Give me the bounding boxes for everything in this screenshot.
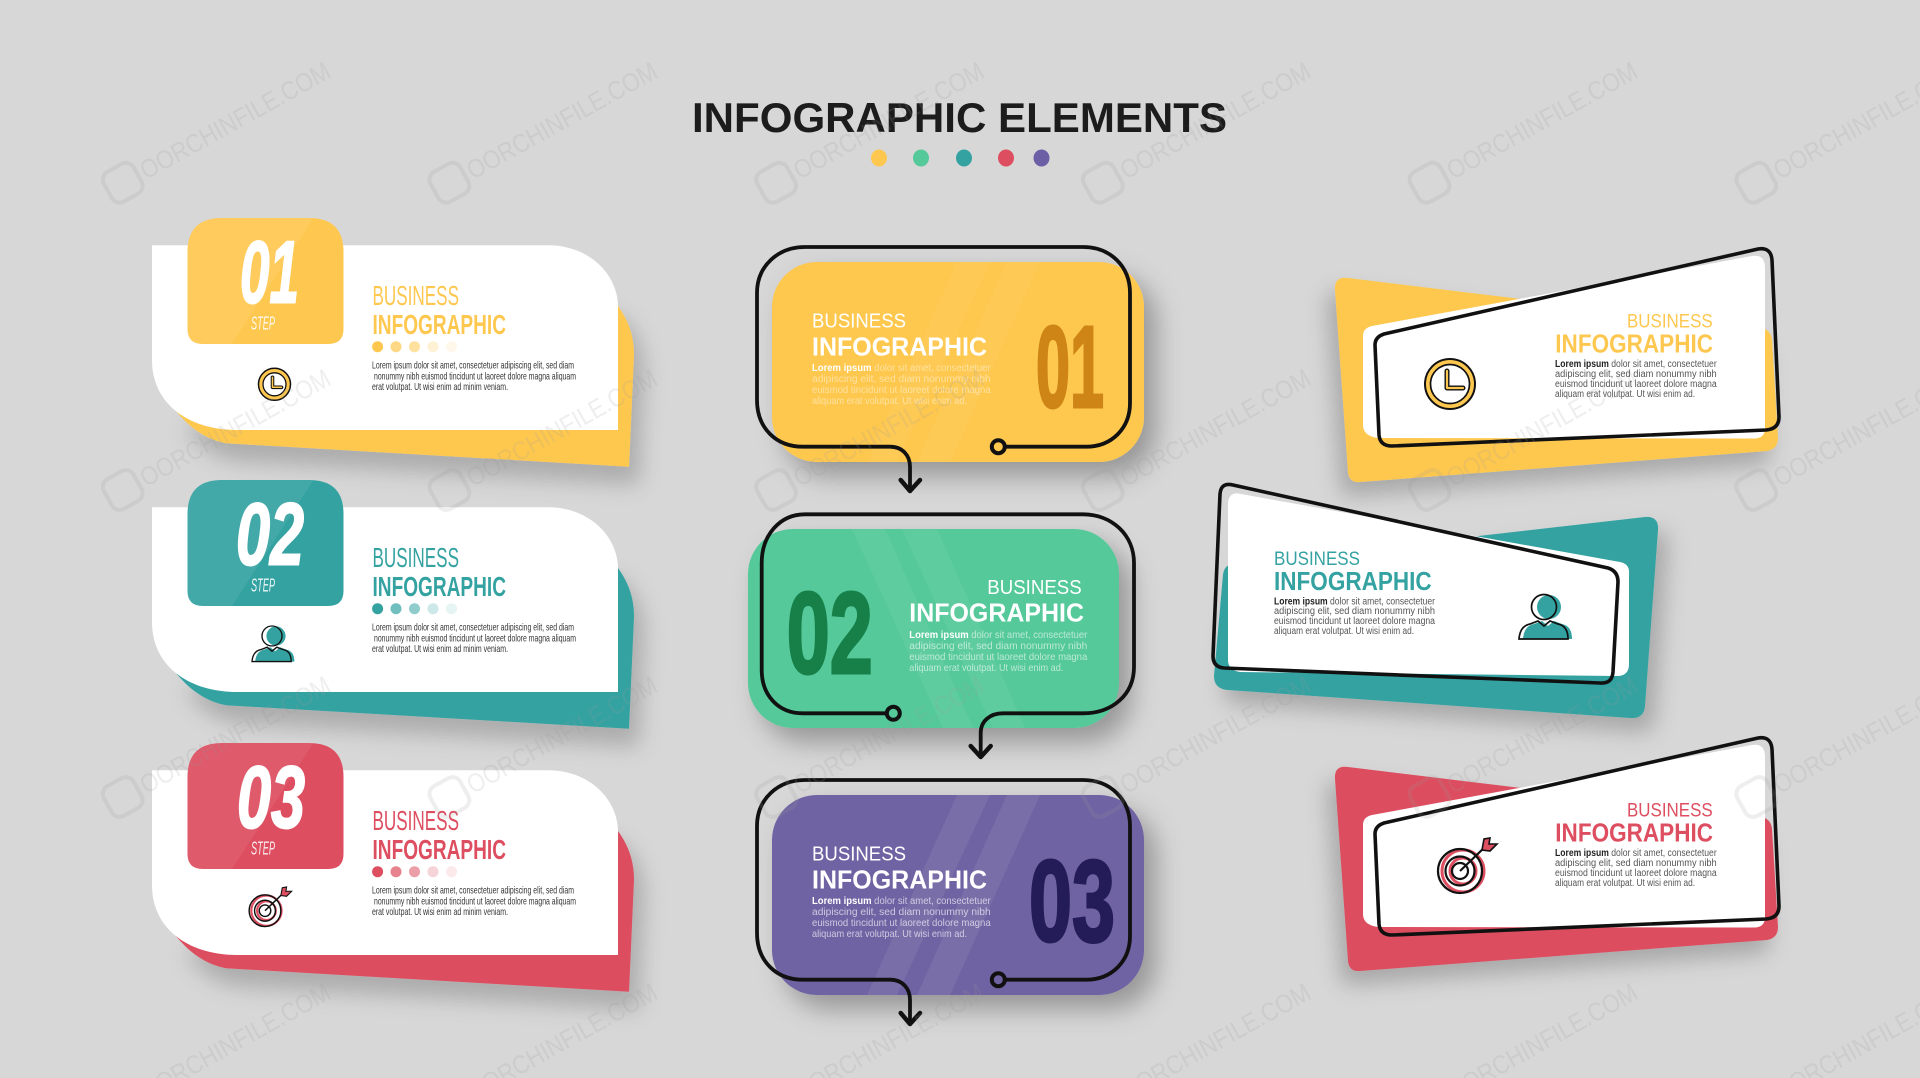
body text: euismod tincidunt ut laoreet dolore magna <box>1555 379 1717 390</box>
step label: STEP <box>251 838 275 858</box>
heading: BUSINESS <box>1627 311 1713 333</box>
watermarks: OORCHINFILE.COM <box>788 56 989 185</box>
body text: adipiscing elit, sed diam nonummy nibh <box>1555 858 1717 869</box>
heading: BUSINESS <box>372 542 459 573</box>
panel: left step 02 <box>152 476 634 729</box>
body text <box>812 896 991 940</box>
subheading: INFOGRAPHIC <box>812 331 987 361</box>
body text: euismod tincidunt ut laoreet dolore magna <box>1555 868 1717 879</box>
outline with arrow <box>757 780 1130 1024</box>
body text: adipiscing elit, sed diam nonummy nibh <box>812 907 991 918</box>
panel: right 03 <box>1335 738 1779 971</box>
subheading: INFOGRAPHIC <box>1274 568 1432 596</box>
panel: left step 01 <box>152 214 634 467</box>
icon: person <box>1519 594 1572 639</box>
icon: person <box>252 626 294 662</box>
body text <box>1555 848 1717 889</box>
watermarks: OORCHINFILE.COM <box>461 56 662 185</box>
subheading: INFOGRAPHIC <box>1555 819 1713 847</box>
subheading: INFOGRAPHIC <box>909 598 1084 628</box>
step label: STEP <box>251 575 275 595</box>
step number: 01 <box>240 222 299 321</box>
heading: BUSINESS <box>1627 800 1713 822</box>
body text: Lorem ipsum dolor sit amet, consectetuer <box>909 630 1088 641</box>
body text: adipiscing elit, sed diam nonummy nibh <box>1274 606 1435 617</box>
step number: 02 <box>236 484 304 583</box>
panel: centre 03 <box>757 780 1144 1024</box>
body text: nonummy nibh euismod tincidunt ut laoreet dolore magna aliquam <box>374 895 576 907</box>
subheading: INFOGRAPHIC <box>372 309 506 340</box>
body text: euismod tincidunt ut laoreet dolore magna <box>812 918 991 929</box>
watermarks: OORCHINFILE.COM <box>461 670 662 799</box>
watermarks: OORCHINFILE.COM <box>788 363 989 492</box>
panel: right 02 <box>1213 484 1658 718</box>
subheading: INFOGRAPHIC <box>372 571 506 602</box>
watermarks: OORCHINFILE.COM <box>135 363 336 492</box>
heading: BUSINESS <box>812 310 906 332</box>
body text: euismod tincidunt ut laoreet dolore magna <box>909 652 1088 663</box>
icon: target <box>249 887 292 927</box>
box highlight <box>188 480 313 606</box>
watermarks: OORCHINFILE.COM <box>135 56 336 185</box>
body text: aliquam erat volutpat. Ut wisi enim ad. <box>1555 878 1695 889</box>
white card <box>1363 745 1765 928</box>
black outline <box>1375 738 1779 935</box>
subheading: INFOGRAPHIC <box>812 864 987 894</box>
watermarks: OORCHINFILE.COM <box>1115 56 1316 185</box>
body text: nonummy nibh euismod tincidunt ut laoreet dolore magna aliquam <box>374 632 576 644</box>
body text: Lorem ipsum dolor sit amet, consectetuer adipiscing elit, sed diam <box>372 359 574 371</box>
icon: clock <box>1425 359 1475 409</box>
streaks <box>852 529 1025 728</box>
body text <box>909 630 1088 674</box>
box highlight <box>188 743 313 869</box>
body text: aliquam erat volutpat. Ut wisi enim ad. <box>1555 389 1695 400</box>
icon: clock <box>258 368 290 400</box>
body text <box>1274 596 1436 637</box>
body text: aliquam erat volutpat. Ut wisi enim ad. <box>812 396 967 407</box>
title colour dots <box>871 150 1050 166</box>
body text: aliquam erat volutpat. Ut wisi enim ad. <box>909 663 1063 674</box>
body text: adipiscing elit, sed diam nonummy nibh <box>812 374 991 385</box>
white card <box>152 245 618 430</box>
number box <box>188 480 344 606</box>
icon: target <box>1438 838 1497 893</box>
back shape <box>1335 278 1778 482</box>
step label: STEP <box>251 313 275 333</box>
white card <box>1363 256 1765 438</box>
number box <box>188 743 344 869</box>
body text <box>372 621 576 655</box>
body text: Lorem ipsum dolor sit amet, consectetuer <box>812 363 991 374</box>
watermarks: OORCHINFILE.COM <box>1441 56 1642 185</box>
number box <box>188 218 344 344</box>
heading: BUSINESS <box>372 280 459 311</box>
back shape <box>1335 767 1778 971</box>
watermarks: OORCHINFILE.COM <box>788 670 989 799</box>
watermarks: OORCHINFILE.COM <box>135 670 336 799</box>
body text: erat volutpat. Ut wisi enim ad minim veniam. <box>372 906 508 918</box>
body text: Lorem ipsum dolor sit amet, consectetuer adipiscing elit, sed diam <box>372 884 574 896</box>
progress dots <box>372 866 457 877</box>
body <box>772 262 1144 462</box>
big number: 02 <box>787 568 873 698</box>
panel: right 01 <box>1335 249 1779 482</box>
watermarks: OORCHINFILE.COM <box>1441 363 1642 492</box>
box highlight <box>188 218 313 344</box>
white card <box>152 770 618 955</box>
watermarks: OORCHINFILE.COM <box>1441 670 1642 799</box>
back shape <box>175 820 634 992</box>
white card <box>1228 493 1629 676</box>
progress dots <box>372 603 457 614</box>
body text: erat volutpat. Ut wisi enim ad minim veniam. <box>372 643 508 655</box>
watermarks: OORCHINFILE.COM <box>1115 363 1316 492</box>
body text: adipiscing elit, sed diam nonummy nibh <box>1555 369 1717 380</box>
body text: aliquam erat volutpat. Ut wisi enim ad. <box>1274 626 1414 637</box>
big number: 01 <box>1036 302 1104 432</box>
progress dots <box>372 341 457 352</box>
body text: Lorem ipsum dolor sit amet, consectetuer adipiscing elit, sed diam <box>372 621 574 633</box>
outline with arrow <box>757 247 1130 491</box>
panel: centre 01 <box>757 247 1144 491</box>
body text: Lorem ipsum dolor sit amet, consectetuer <box>812 896 991 907</box>
outline with arrow <box>762 514 1134 757</box>
subheading: INFOGRAPHIC <box>372 834 506 865</box>
body text: aliquam erat volutpat. Ut wisi enim ad. <box>812 929 967 940</box>
body text <box>812 363 991 407</box>
white card <box>152 507 618 692</box>
watermarks: OORCHINFILE.COM <box>1115 670 1316 799</box>
body text: Lorem ipsum dolor sit amet, consectetuer <box>1274 596 1436 607</box>
body <box>748 529 1119 728</box>
heading: BUSINESS <box>1274 548 1360 570</box>
body text: euismod tincidunt ut laoreet dolore magna <box>1274 616 1435 627</box>
back shape <box>175 295 634 467</box>
back shape <box>175 557 634 729</box>
body text: erat volutpat. Ut wisi enim ad minim veniam. <box>372 381 508 393</box>
body text: euismod tincidunt ut laoreet dolore magna <box>812 385 991 396</box>
heading: BUSINESS <box>987 577 1082 599</box>
big number: 03 <box>1029 836 1115 966</box>
panel: centre 02 <box>748 514 1134 757</box>
title: INFOGRAPHIC ELEMENTS <box>692 94 1227 141</box>
body text: Lorem ipsum dolor sit amet, consectetuer <box>1555 848 1717 859</box>
body text: Lorem ipsum dolor sit amet, consectetuer <box>1555 359 1717 370</box>
watermarks: OORCHINFILE.COM <box>461 363 662 492</box>
body text <box>372 884 576 918</box>
black outline <box>1375 249 1779 446</box>
body text: nonummy nibh euismod tincidunt ut laoreet dolore magna aliquam <box>374 370 576 382</box>
body text: adipiscing elit, sed diam nonummy nibh <box>909 641 1088 652</box>
body text <box>372 359 576 393</box>
body text <box>1555 359 1717 400</box>
streaks <box>867 262 1040 462</box>
step number: 03 <box>237 747 305 846</box>
back shape <box>1214 517 1658 718</box>
panel: left step 03 <box>152 739 634 992</box>
body <box>772 795 1144 995</box>
subheading: INFOGRAPHIC <box>1555 330 1713 358</box>
heading: BUSINESS <box>812 843 906 865</box>
heading: BUSINESS <box>372 805 459 836</box>
black outline <box>1213 484 1618 683</box>
streaks <box>867 795 1040 995</box>
